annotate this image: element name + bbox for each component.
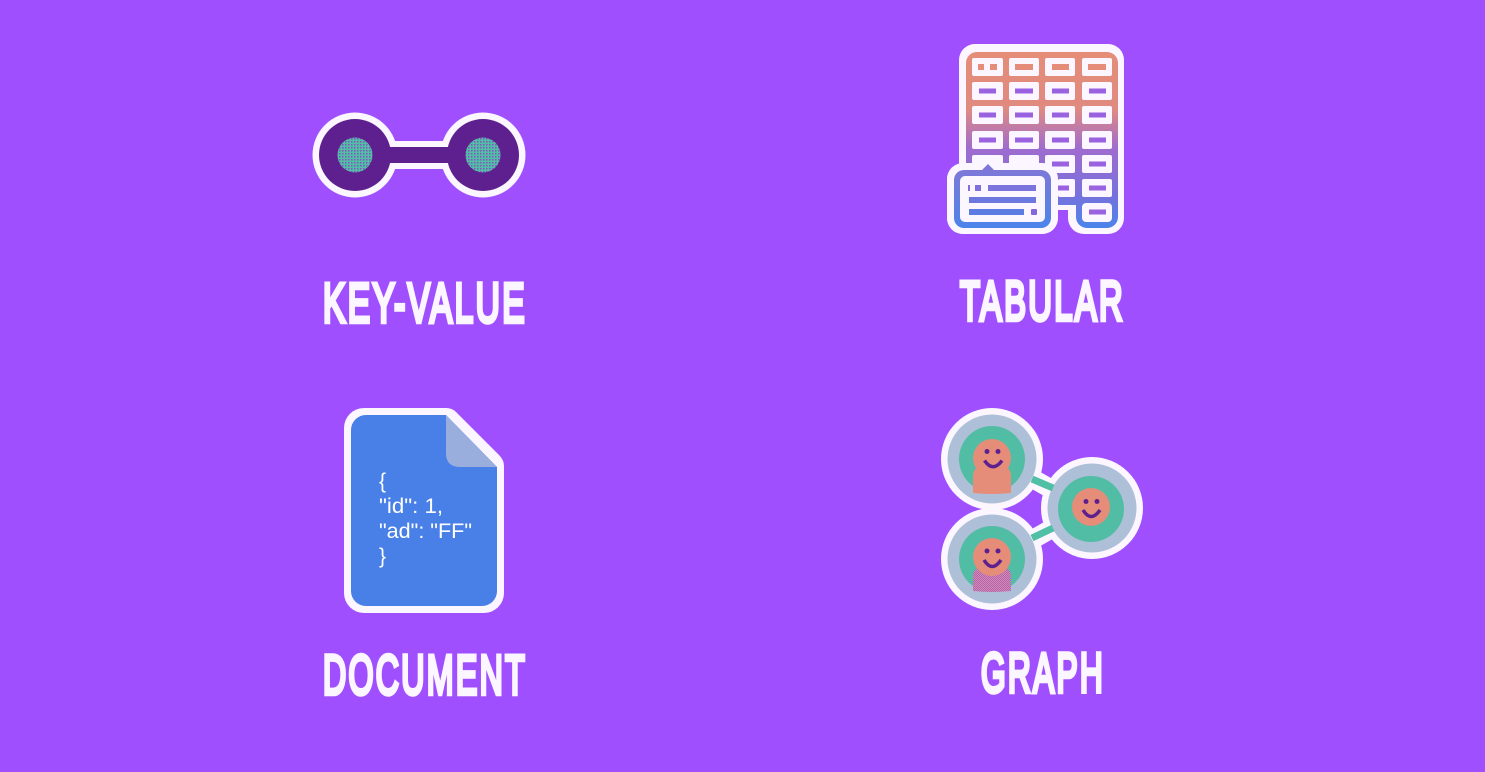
panel: tabular bbox=[947, 44, 1125, 332]
mini card bbox=[947, 156, 1058, 234]
page fold bbox=[446, 415, 497, 467]
JSON text: { bbox=[379, 470, 386, 493]
heading: graph: GRAPH bbox=[981, 641, 1105, 704]
person node: right bbox=[1041, 457, 1143, 559]
JSON text: "id": 1, bbox=[379, 495, 443, 518]
JSON text bbox=[379, 470, 472, 568]
icon: JSON document bbox=[344, 408, 504, 613]
cell dashes bbox=[978, 64, 1106, 70]
JSON text: "ad": "FF" bbox=[379, 520, 472, 543]
icon: table with card bbox=[947, 44, 1124, 234]
green links bbox=[1032, 479, 1053, 538]
table outline bbox=[947, 44, 1124, 234]
JSON text: } bbox=[379, 545, 386, 568]
person node: bottom bbox=[941, 508, 1043, 610]
table cells bbox=[972, 58, 1112, 222]
heading: document: DOCUMENT bbox=[323, 643, 527, 706]
white link bands bbox=[1030, 477, 1058, 541]
panel: key-value bbox=[312, 112, 527, 334]
person node: top bbox=[941, 408, 1043, 510]
icon: people graph bbox=[941, 408, 1143, 610]
table body bbox=[966, 52, 1118, 228]
page body bbox=[351, 415, 497, 606]
icon: key-value link bbox=[312, 112, 526, 198]
heading: key-value: KEY-VALUE bbox=[323, 271, 527, 334]
page outline bbox=[344, 408, 504, 613]
panel: document bbox=[323, 408, 527, 706]
panel: graph bbox=[941, 408, 1143, 704]
heading: tabular: TABULAR bbox=[960, 269, 1125, 332]
